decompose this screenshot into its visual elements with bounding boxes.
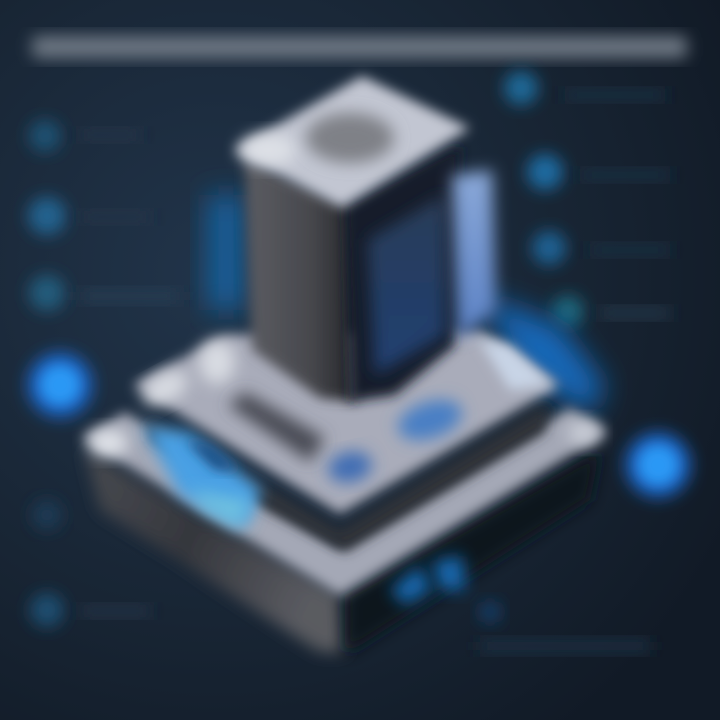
tower [234,76,496,402]
base: bottom layer [82,405,608,655]
left column of indicators [28,120,180,627]
bottom layer corner highlights [88,429,128,457]
tower top highlight [240,134,296,166]
tower light side panel [452,170,496,340]
tower blue panel [368,195,445,375]
tower right face [345,145,460,402]
blue pads [393,393,467,447]
bottom layer inner recess [150,405,548,552]
bright node left [27,352,93,418]
blue panel on base [142,425,262,528]
title bar [32,36,687,58]
bright node right [625,432,691,498]
bottom layer rim [82,408,608,596]
bottom layer right side [345,450,600,655]
right column of indicators [480,71,670,652]
tower left face [245,160,355,402]
middle layer highlights [137,364,193,412]
middle layer top [133,330,560,514]
bottom layer left side [85,450,345,652]
blue glow behind tower [208,195,605,415]
dark slot [228,392,325,462]
blue accents under base [390,565,432,605]
base: middle layer [133,330,560,514]
tower top recess [306,113,394,163]
tower top face [234,76,470,208]
